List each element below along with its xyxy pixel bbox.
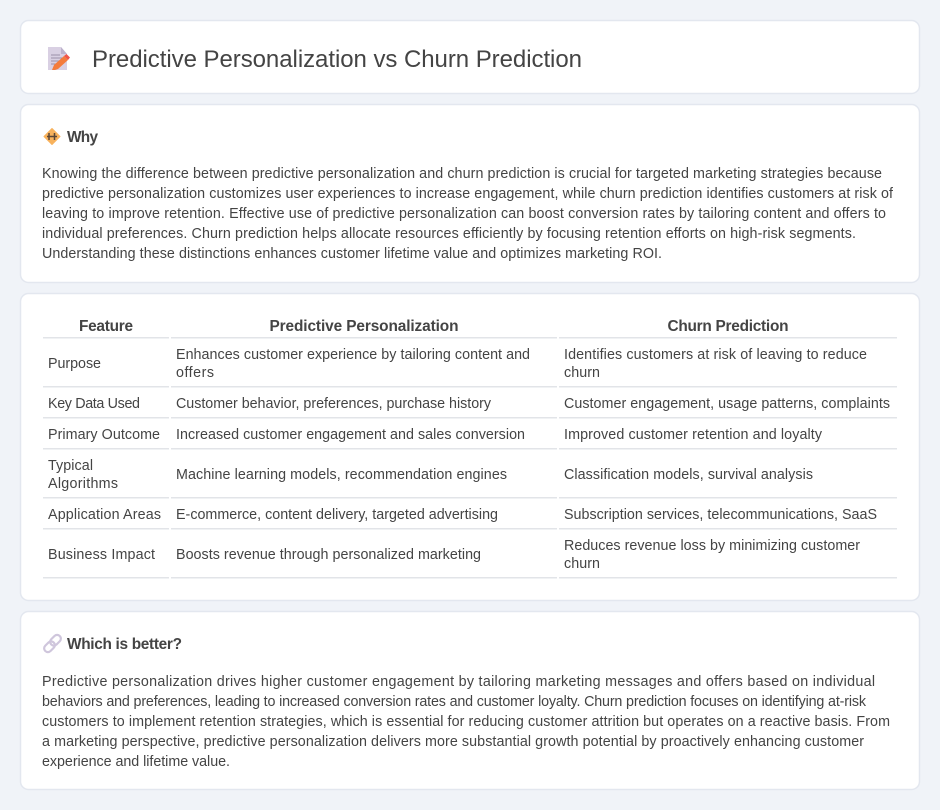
row: key data used: Customer engagement, usage patterns, complaints (564, 396, 890, 412)
row: typical algorithms: Classification models, survival analysis (564, 467, 813, 483)
heading: which is better: Which is better? (67, 636, 182, 653)
row: key data used (48, 396, 890, 412)
table header (79, 318, 788, 335)
row: primary outcome: Improved customer retention and loyalty (564, 427, 823, 443)
row: application areas: E-commerce, content delivery, targeted advertising (176, 507, 498, 523)
row: purpose: churn (564, 365, 600, 381)
why paragraph: leaving to improve retention. Effective use of predictive personalization can boost conversion rates by tailoring content and offers to (42, 206, 886, 222)
panel: why (20, 104, 920, 282)
icon: diamond sign (44, 128, 60, 144)
row: typical algorithms: Algorithms (48, 476, 118, 492)
panel: which is better (20, 612, 920, 790)
panel: comparison table (20, 294, 920, 600)
which is better paragraph: a marketing perspective, predictive personalization delivers more substantial growth potential by proactively enhancing customer (42, 734, 864, 750)
row: purpose: Identifies customers at risk of leaving to reduce (564, 347, 867, 363)
why paragraph: Knowing the difference between predictive personalization and churn prediction is crucial for targeted marketing strategies because (42, 166, 882, 182)
why paragraph: individual preferences. Churn prediction helps allocate resources efficiently by focusing retention efforts on high-risk segments. (42, 226, 856, 242)
which is better paragraph: Predictive personalization drives higher customer engagement by tailoring marketing messages and offers based on individual (42, 674, 875, 690)
row: typical algorithms: Typical (48, 458, 93, 474)
table header: Churn Prediction (668, 318, 788, 335)
row: business impact: Boosts revenue through personalized marketing (176, 547, 481, 563)
row: key data used: Customer behavior, preferences, purchase history (176, 396, 492, 412)
icon: document with pencil (48, 47, 70, 70)
row: purpose (48, 347, 867, 381)
icon: chain link (43, 633, 62, 654)
row: business impact: Business Impact (48, 547, 155, 563)
why paragraph: predictive personalization customizes user experiences to increase engagement, while churn prediction identifies customers at risk of (42, 186, 893, 202)
row: business impact (48, 538, 860, 572)
row: application areas: Application Areas (48, 507, 161, 523)
title text: Predictive Personalization vs Churn Prediction (92, 46, 582, 73)
row: primary outcome: Primary Outcome (48, 427, 160, 443)
heading: why: Why (67, 129, 98, 146)
row: primary outcome: Increased customer engagement and sales conversion (176, 427, 525, 443)
why paragraph: Understanding these distinctions enhances customer lifetime value and optimizes marketing ROI. (42, 246, 662, 262)
why paragraph (42, 166, 893, 262)
table header: Predictive Personalization (270, 318, 458, 335)
row: purpose: Purpose (48, 356, 101, 372)
row: primary outcome (48, 427, 823, 443)
row: key data used: Key Data Used (48, 396, 140, 412)
row: purpose: offers (176, 365, 214, 381)
panel: title (20, 20, 920, 94)
row: typical algorithms: Machine learning models, recommendation engines (176, 467, 507, 483)
row: business impact: churn (564, 556, 600, 572)
table header: Feature (79, 318, 133, 335)
row: purpose: Enhances customer experience by tailoring content and (176, 347, 530, 363)
which is better paragraph: behaviors and preferences, leading to increased conversion rates and customer loyalty. Churn prediction focuses on identifying at-risk (42, 694, 867, 710)
which is better paragraph: experience and lifetime value. (42, 754, 230, 770)
which is better paragraph (42, 674, 890, 770)
row: business impact: Reduces revenue loss by minimizing customer (564, 538, 860, 554)
table row rules (43, 337, 897, 578)
which is better paragraph: customers to implement retention strategies, which is essential for reducing customer attrition but operates on a reactive basis. From (42, 714, 890, 730)
row: application areas (48, 507, 877, 523)
row: typical algorithms (48, 458, 813, 492)
row: application areas: Subscription services, telecommunications, SaaS (564, 507, 877, 523)
